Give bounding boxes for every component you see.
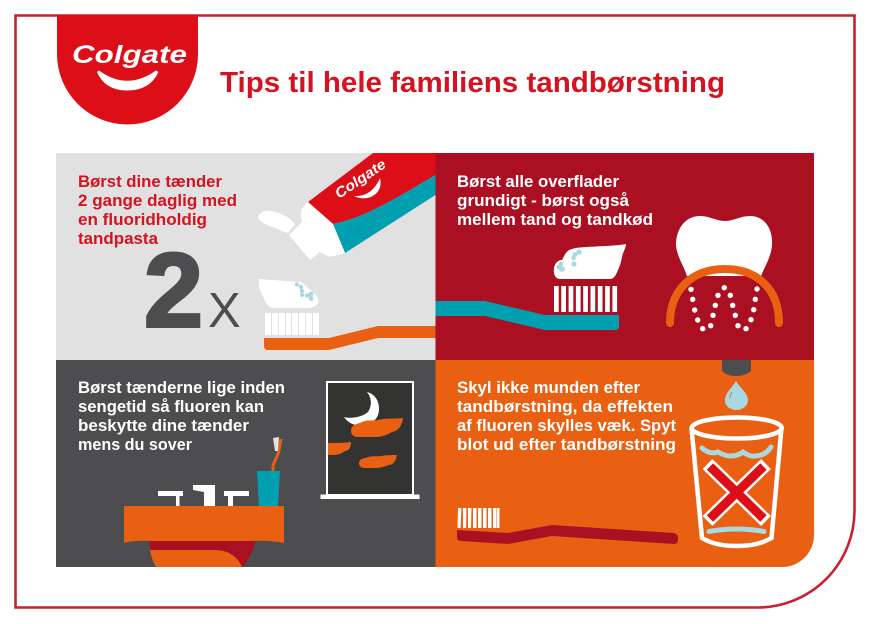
icon: cup with toothbrush <box>257 437 281 506</box>
icon: toothpaste tube: Colgate <box>332 157 389 202</box>
icon: sink with faucet <box>124 485 284 567</box>
panel text: all surfaces: mellem tand og tandkød <box>457 211 653 229</box>
panel: brush before bedtime <box>56 360 436 567</box>
icon: night window <box>320 382 420 499</box>
icon: toothbrush with paste teal <box>436 244 626 330</box>
panel text: do not rinse: blot ud efter tandbørstning <box>457 436 676 454</box>
panel text: twice daily: 2 gange daglig med <box>78 192 237 210</box>
big 2x label <box>144 232 241 350</box>
panel text: twice daily: tandpasta <box>78 230 159 248</box>
icon: tooth and gum with dots <box>670 216 779 331</box>
panel text: do not rinse <box>457 379 677 454</box>
panel text: do not rinse: tandbørstning, da effekten <box>457 398 673 416</box>
panel: brush twice daily <box>56 153 436 360</box>
icon: tap and water drop <box>722 360 751 410</box>
icon: dark red toothbrush <box>457 508 678 544</box>
panel: brush all surfaces <box>436 153 814 360</box>
panel text: do not rinse: af fluoren skylles væk. Spyt <box>457 417 677 435</box>
Colgate logo badge: Colgate <box>72 41 187 69</box>
panel text: do not rinse: Skyl ikke munden efter <box>457 379 641 397</box>
big 2x label: 2 <box>144 232 203 350</box>
big 2x label: X <box>208 284 241 338</box>
panel text: twice daily <box>78 173 237 248</box>
title: Tips til hele familiens tandbørstning <box>220 67 725 99</box>
panel text: bedtime: Børst tænderne lige inden <box>78 379 285 397</box>
icon: glass with red cross <box>692 418 782 546</box>
panel text: all surfaces <box>457 173 653 229</box>
panel text: all surfaces: grundigt - børst også <box>457 192 630 210</box>
panel text: bedtime: beskytte dine tænder <box>78 417 250 435</box>
panel text: twice daily: Børst dine tænder <box>78 173 223 191</box>
Colgate logo badge <box>57 15 198 124</box>
icon: toothbrush with paste <box>259 279 436 350</box>
icon: toothpaste tube <box>258 153 436 260</box>
panel text: bedtime: sengetid så fluoren kan <box>78 398 264 416</box>
panel text: all surfaces: Børst alle overflader <box>457 173 620 191</box>
panel text: twice daily: en fluoridholdig <box>78 211 207 229</box>
panel text: bedtime: mens du sover <box>78 436 193 454</box>
panel text: bedtime <box>78 379 285 454</box>
panel: do not rinse <box>436 360 814 567</box>
